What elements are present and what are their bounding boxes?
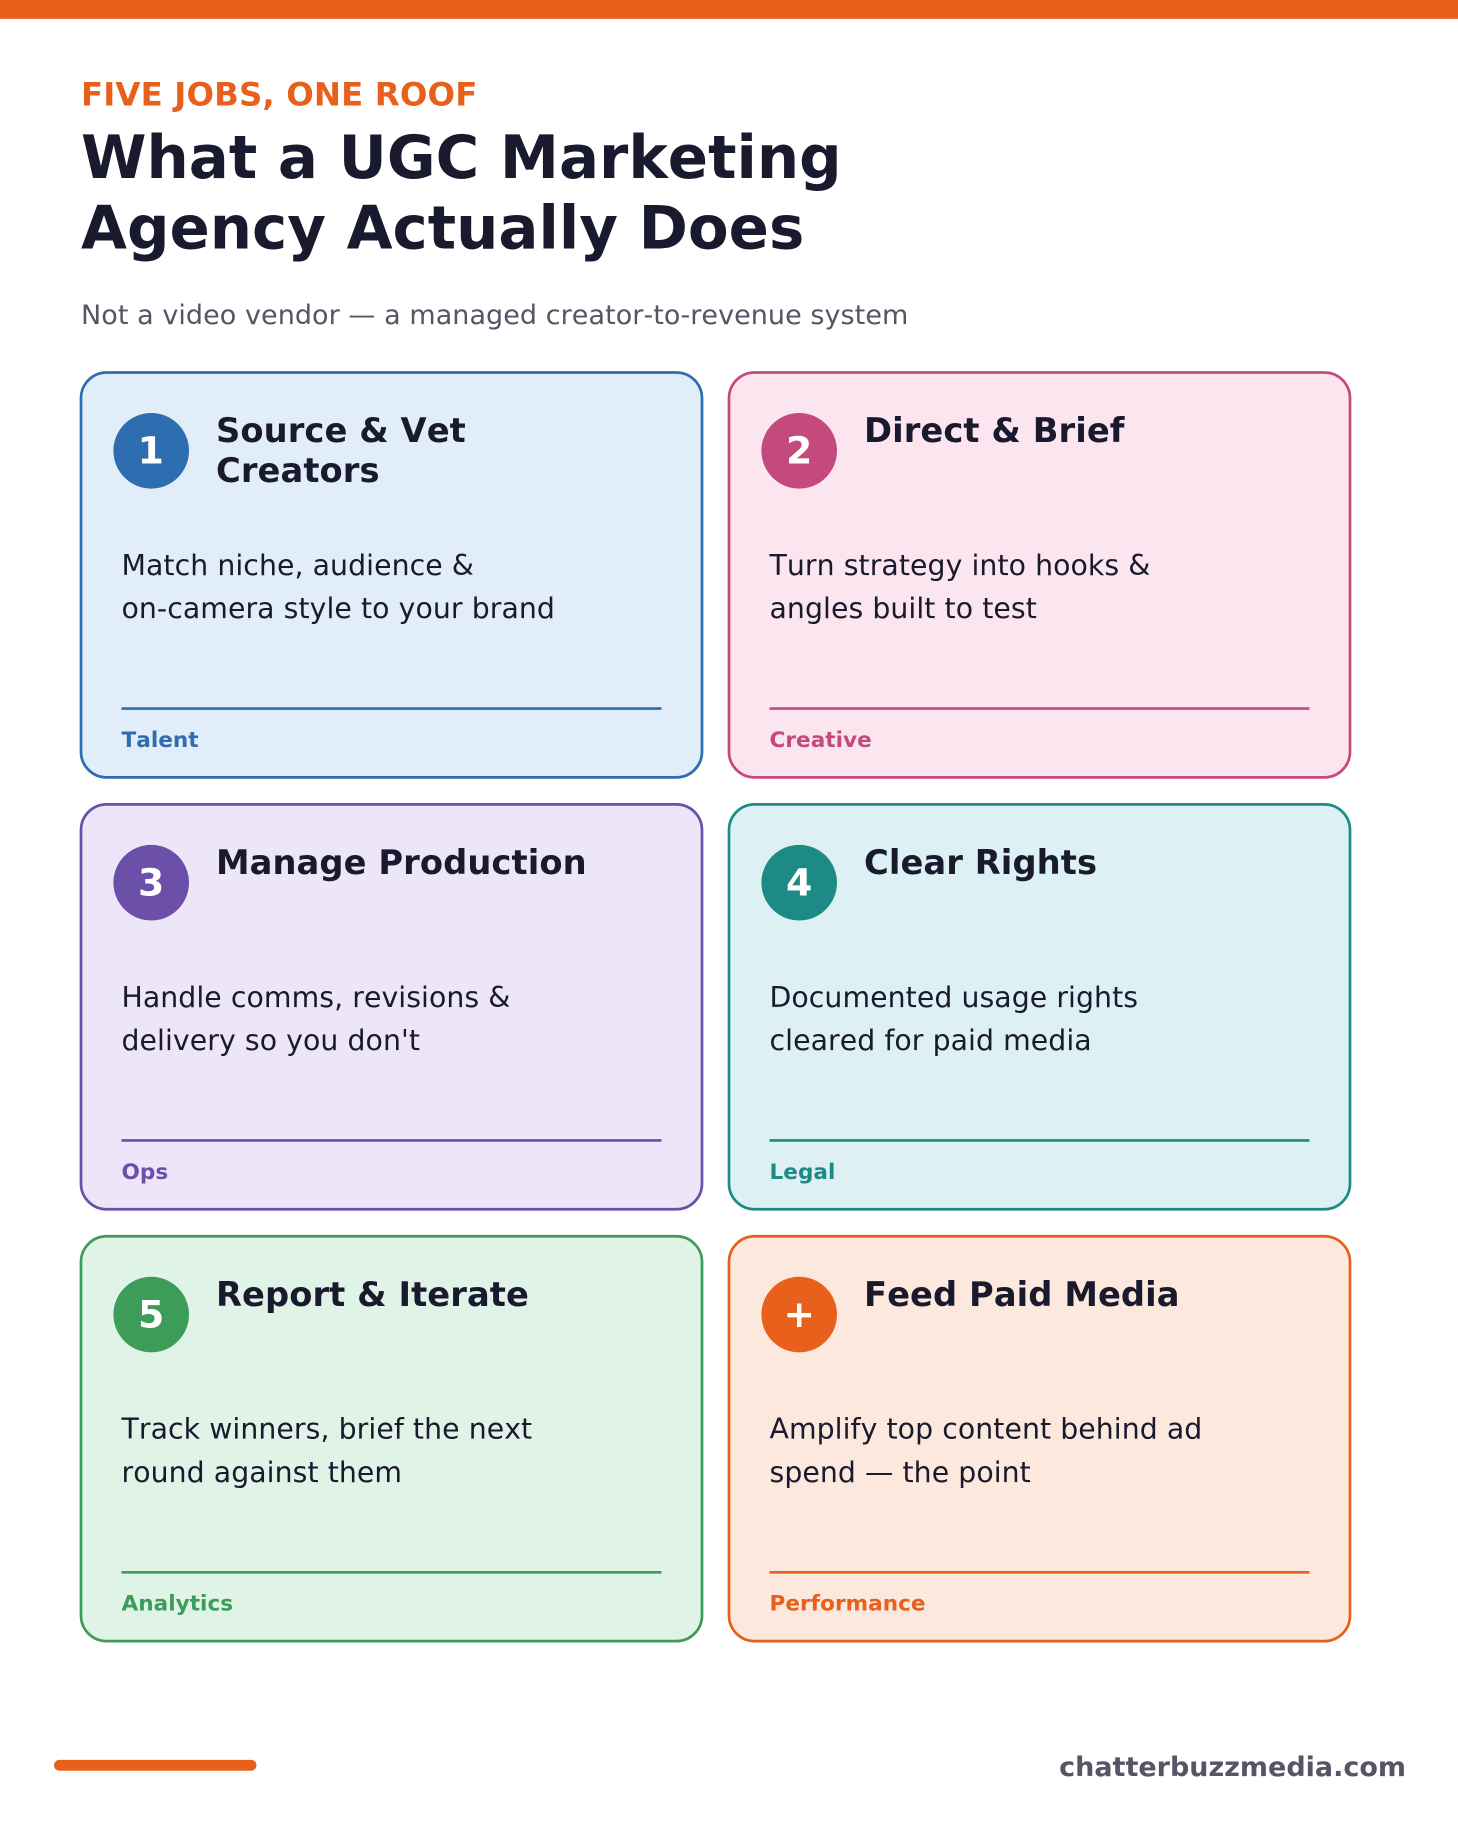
card body: Handle comms, revisions & xyxy=(122,981,510,1014)
panel: report and iterate xyxy=(81,1236,702,1641)
icon: number 3 xyxy=(113,845,189,920)
card heading: Direct & Brief xyxy=(864,411,1125,450)
tag: Creative xyxy=(770,728,872,753)
icon: number 4 xyxy=(761,845,837,920)
subtitle: Not a video vendor — a managed creator-to-revenue system xyxy=(81,300,908,331)
eyebrow heading: FIVE JOBS, ONE ROOF xyxy=(81,75,477,113)
card heading: Clear Rights xyxy=(864,843,1097,882)
footer website: chatterbuzzmedia.com xyxy=(1059,1752,1406,1783)
card body: Match niche, audience & xyxy=(122,549,474,582)
tag: Analytics xyxy=(122,1592,233,1617)
tag: Legal xyxy=(770,1160,835,1185)
icon: number 2: 2 xyxy=(786,429,812,473)
card body: delivery so you don't xyxy=(122,1024,420,1057)
card body: cleared for paid media xyxy=(770,1024,1092,1057)
icon: plus xyxy=(761,1277,837,1352)
card body: Amplify top content behind ad xyxy=(770,1413,1202,1446)
card body: on-camera style to your brand xyxy=(122,592,555,625)
card heading: Feed Paid Media xyxy=(864,1275,1180,1314)
tag: Performance xyxy=(770,1592,926,1617)
card body: angles built to test xyxy=(770,592,1037,625)
icon: number 2 xyxy=(761,413,837,489)
card heading: Manage Production xyxy=(216,843,587,882)
title: Agency Actually Does xyxy=(81,194,804,263)
tag: Talent xyxy=(122,728,199,753)
title: What a UGC Marketing xyxy=(81,124,842,193)
card heading: Creators xyxy=(216,451,380,490)
panel: clear rights xyxy=(729,804,1350,1209)
panel: source and vet creators xyxy=(81,372,702,777)
panel: feed paid media xyxy=(729,1236,1350,1641)
tag: Ops xyxy=(122,1160,168,1185)
icon: number 1 xyxy=(113,413,189,489)
card body: Track winners, brief the next xyxy=(120,1413,532,1446)
card heading: Source & Vet xyxy=(216,411,466,450)
card body: Documented usage rights xyxy=(770,981,1138,1014)
panel: direct and brief xyxy=(729,372,1350,777)
panel: manage production xyxy=(81,804,702,1209)
icon: plus: + xyxy=(783,1292,815,1336)
icon: number 4: 4 xyxy=(786,860,812,904)
icon: number 5: 5 xyxy=(138,1293,164,1337)
icon: number 3: 3 xyxy=(138,860,164,904)
icon: number 1: 1 xyxy=(138,429,164,473)
icon: number 5 xyxy=(113,1277,189,1352)
card body: spend — the point xyxy=(770,1456,1031,1489)
card body: round against them xyxy=(122,1456,402,1489)
top accent bar xyxy=(0,0,1458,19)
footer accent bar xyxy=(54,1760,256,1771)
card heading: Report & Iterate xyxy=(216,1275,529,1314)
card body: Turn strategy into hooks & xyxy=(768,549,1150,582)
